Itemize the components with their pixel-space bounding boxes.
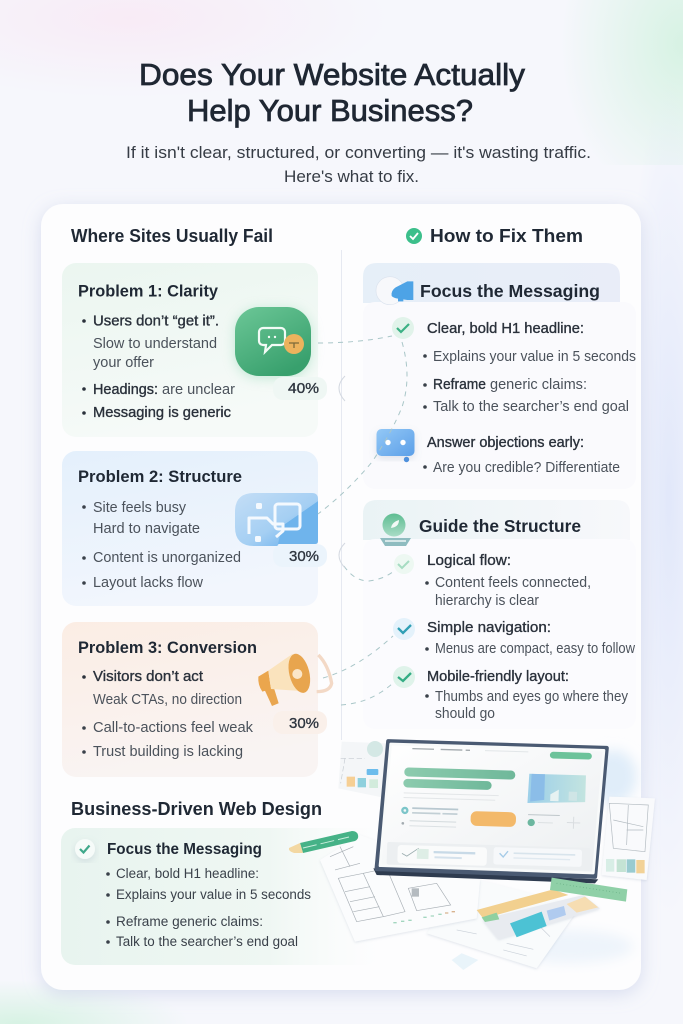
- text: simple navigation: [425, 620, 635, 657]
- floor plan sheet: [602, 797, 655, 880]
- icon: chat bubble: [376, 429, 414, 462]
- heading: how to fix them: How to Fix Them: [430, 225, 583, 246]
- rulers and eraser: [477, 878, 627, 939]
- panel: problem 2 structure: [62, 451, 318, 606]
- subtitle: [126, 143, 591, 186]
- text: logical flow: Logical flow:: [427, 553, 511, 569]
- wireframe sheet front: [320, 835, 480, 942]
- panel: guide the structure: [363, 500, 636, 729]
- panel: business-driven summary: [61, 828, 381, 965]
- text: problem 1 bullets: Messaging is generic: [93, 405, 231, 421]
- small palette sheet: [338, 741, 387, 798]
- subtitle: If it isn't clear, structured, or converting — it's wasting traffic.: [126, 143, 591, 162]
- text: problem 1 bullets: Users don’t “get it”.: [93, 314, 219, 330]
- text: summary bullets: Talk to the searcher’s end goal: [116, 934, 298, 949]
- text: problem 1 bullets: [82, 314, 235, 421]
- heading: problem 3: Problem 3: Conversion: [78, 638, 257, 657]
- icon: check blue: [393, 618, 415, 640]
- text: clear headline group: generic claims:: [490, 377, 587, 393]
- badge: 30% conversion: 30%: [289, 715, 319, 732]
- text: clear headline group: Explains your value in 5 seconds: [433, 349, 636, 365]
- title: Help Your Business?: [187, 93, 473, 128]
- heading: focus the messaging: Focus the Messaging: [420, 281, 600, 301]
- icon: green chat bubble: [235, 307, 311, 378]
- text: problem 2 bullets: [82, 500, 241, 591]
- text: mobile friendly layout: should go: [435, 706, 495, 722]
- text: clear headline group: Clear, bold H1 headline:: [427, 321, 584, 337]
- text: problem 2 bullets: Layout lacks flow: [93, 575, 204, 591]
- text: answer objections: Answer objections early:: [427, 435, 584, 451]
- icon: megaphone: [258, 651, 332, 706]
- text: problem 2 bullets: Hard to navigate: [93, 521, 200, 537]
- text: logical flow: [425, 553, 591, 609]
- icon: check faint: [394, 554, 414, 574]
- main card: [41, 204, 641, 990]
- text: problem 3 bullets: Visitors don’t act: [93, 669, 203, 685]
- tablet: [373, 741, 607, 883]
- icon: plant bowl: [380, 514, 411, 546]
- badge: 40%: 40%: [288, 380, 319, 397]
- text: simple navigation: Menus are compact, easy to follow: [435, 641, 635, 657]
- text: problem 2 bullets: Site feels busy: [93, 500, 187, 516]
- text: answer objections: Are you credible? Differentiate: [433, 460, 620, 476]
- text: summary bullets: Explains your value in 5 seconds: [116, 887, 311, 902]
- wireframe sheet back: [427, 877, 580, 968]
- connectors: dashed links between problems and fixes: [318, 336, 407, 705]
- panel: problem 3 conversion: [62, 622, 318, 777]
- illustration: tablet with wireframes: [320, 741, 655, 970]
- text: mobile friendly layout: Mobile-friendly layout:: [427, 669, 569, 685]
- panel: focus the messaging: [363, 263, 636, 489]
- text: clear headline group: [423, 321, 636, 415]
- subtitle: Here's what to fix.: [284, 167, 419, 186]
- text: problem 3 bullets: Weak CTAs, no direction: [93, 692, 242, 708]
- text: simple navigation: Simple navigation:: [427, 620, 551, 636]
- icon: check: [392, 317, 414, 339]
- heading: business-driven web design: Business-Driven Web Design: [71, 798, 322, 819]
- text: mobile friendly layout: Thumbs and eyes go where they: [435, 689, 629, 705]
- text: problem 3 bullets: Call-to-actions feel weak: [93, 720, 254, 736]
- text: summary bullets: Clear, bold H1 headline:: [116, 866, 259, 881]
- heading: problem 1: Problem 1: Clarity: [78, 282, 219, 300]
- text: problem 1 bullets: Headings:: [93, 382, 158, 398]
- badge: 40%: [273, 377, 327, 400]
- icon: blue megaphone: [376, 277, 413, 305]
- panel: problem 1 clarity: [62, 263, 318, 437]
- text: logical flow: hierarchy is clear: [435, 593, 539, 609]
- badge: 30% structure: 30%: [289, 548, 319, 565]
- text: summary bullets: Reframe generic claims:: [116, 914, 263, 929]
- text: clear headline group: Reframe: [433, 377, 486, 393]
- heading: guide the structure: Guide the Structure: [419, 516, 581, 536]
- title: Does Your Website Actually: [139, 57, 526, 92]
- heading: problem 2: Problem 2: Structure: [78, 467, 242, 486]
- text: answer objections: [423, 435, 620, 476]
- text: summary bullets: [106, 866, 311, 949]
- text: problem 1 bullets: Slow to understand: [93, 336, 217, 352]
- badge: 30% structure: [273, 544, 327, 567]
- text: mobile friendly layout: [425, 669, 629, 722]
- icon: blue layout windows: [235, 493, 318, 546]
- text: problem 1 bullets: are unclear: [162, 382, 235, 398]
- icon: green pencil: [289, 831, 358, 853]
- text: problem 3 bullets: [82, 669, 254, 760]
- heading: where sites usually fail: Where Sites Usually Fail: [71, 225, 273, 246]
- text: clear headline group: Talk to the searcher’s end goal: [433, 399, 629, 415]
- text: problem 1 bullets: your offer: [93, 355, 154, 371]
- text: problem 2 bullets: Content is unorganized: [93, 550, 241, 566]
- badge: 30% conversion: [273, 711, 327, 734]
- icon: check badge: [75, 839, 95, 859]
- heading: focus the messaging summary: Focus the Messaging: [107, 841, 262, 858]
- title: [139, 57, 526, 128]
- text: problem 3 bullets: Trust building is lacking: [93, 744, 243, 760]
- text: logical flow: Content feels connected,: [435, 575, 591, 591]
- icon: check green: [393, 666, 415, 688]
